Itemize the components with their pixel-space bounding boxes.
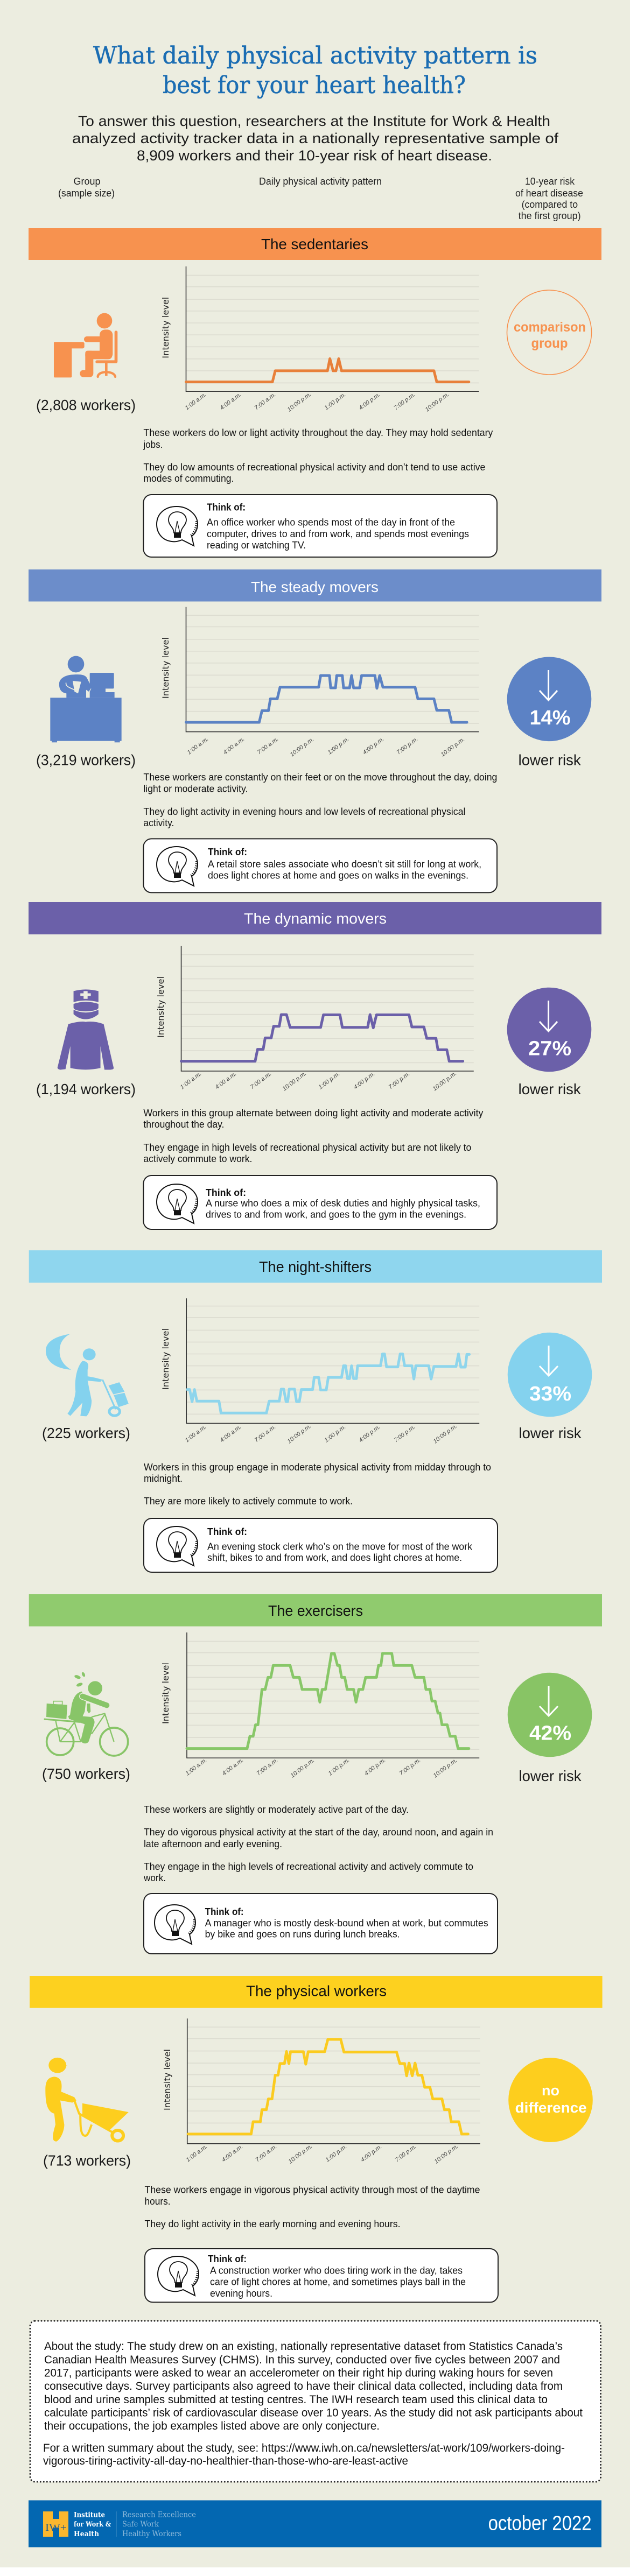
line chart: exercisers: 4:00 p.m. (363, 1757, 387, 1777)
description: They are more likely to actively commute to work. (144, 1496, 353, 1507)
callout: think of (144, 1894, 498, 1954)
icon: light bulb (157, 506, 198, 546)
line chart: dynamic movers: 7:00 a.m. (249, 1071, 273, 1090)
line chart: steady movers: 1:00 p.m. (327, 736, 351, 756)
callout: think of: A manager who is mostly desk-bound when at work, but commutes (205, 1918, 488, 1929)
line chart: sedentaries: 1:00 p.m. (324, 391, 347, 411)
callout: think of: Think of: (208, 2254, 247, 2264)
callout: think of: A nurse who does a mix of desk duties and highly physical tasks, (206, 1198, 480, 1208)
line chart: night-shifters: 4:00 p.m. (358, 1424, 382, 1444)
sample size: (3,219 workers) (36, 752, 136, 769)
column header: risk: 10-year risk (525, 176, 575, 187)
callout: think of: by bike and goes on runs during lunch breaks. (205, 1929, 400, 1940)
line chart: steady movers: 4:00 p.m. (362, 736, 386, 756)
description: They do low amounts of recreational physical activity and don’t tend to use active (143, 462, 485, 473)
line chart: physical workers: 4:00 p.m. (360, 2143, 383, 2163)
line chart: night-shifters: 7:00 p.m. (393, 1424, 417, 1444)
callout: think of: Think of: (208, 847, 247, 857)
intro text (72, 113, 559, 164)
line chart: night-shifters: 4:00 a.m. (219, 1424, 243, 1444)
callout: think of: A construction worker who does tiring work in the day, takes (210, 2265, 463, 2276)
icon: person sitting at desk (54, 313, 117, 377)
line chart: night-shifters: 10:00 p.m. (432, 1423, 458, 1445)
description: hours. (144, 2196, 170, 2207)
panel: about the study: vigorous-tiring-activity-all-day-no-healthier-than-those-who-are-least-active (43, 2455, 408, 2467)
line chart: sedentaries: 4:00 a.m. (219, 391, 243, 411)
description: These workers engage in vigorous physical activity through most of the daytime (144, 2185, 480, 2195)
footer (29, 2500, 601, 2547)
panel: the dynamic movers (29, 902, 601, 1229)
banner: the physical workers (30, 1976, 603, 2008)
panel: about the study: consecutive days. Survey participants also agreed to have their clinical data collected, including data from (44, 2380, 563, 2392)
badge: 42% lower risk: lower risk (519, 1768, 582, 1784)
sample size: (750 workers) (42, 1765, 130, 1782)
badge: no difference: difference (515, 2100, 587, 2116)
description: They engage in high levels of recreational physical activity but are not likely to (143, 1142, 471, 1153)
banner: the sedentaries: The sedentaries (261, 236, 368, 252)
panel: about the study: 2017, participants were asked to wear an accelerometer on their right hip during waking hours for seven (44, 2367, 553, 2380)
line chart: dynamic movers: Intensity level (156, 976, 166, 1038)
title (93, 42, 537, 99)
line chart: physical workers: 1:00 a.m. (185, 2143, 209, 2163)
callout: think of: does light chores at home and goes on walks in the evenings. (208, 870, 468, 881)
line chart: physical workers: 4:00 a.m. (221, 2143, 244, 2163)
institute name: for Work & (74, 2521, 111, 2529)
badge: 14% lower risk (507, 657, 591, 769)
column header: pattern: Daily physical activity pattern (259, 176, 382, 187)
badge: 14% lower risk: lower risk (519, 752, 582, 769)
callout: think of: computer, drives to and from work, and spends most evenings (207, 529, 469, 539)
panel: about the study: their occupations, the job examples listed above are only conjecture. (44, 2420, 380, 2432)
column header: group: Group (73, 176, 100, 187)
line chart: physical workers (162, 2018, 480, 2165)
description: These workers do low or light activity throughout the day. They may hold sedentary (143, 427, 493, 438)
line chart: night-shifters: 1:00 a.m. (184, 1424, 208, 1444)
line chart: sedentaries: Intensity level (160, 297, 171, 358)
description: Workers in this group engage in moderate physical activity from midday through to (144, 1462, 491, 1473)
line chart: sedentaries: 10:00 p.m. (286, 391, 312, 413)
panel: about the study: blood and urine samples submitted at testing centres. The IWH research team used this clinical data to (44, 2394, 548, 2406)
intro text: To answer this question, researchers at the Institute for Work & Health (78, 113, 550, 129)
line chart: exercisers: Intensity level (160, 1663, 171, 1724)
badge: 27% lower risk: 27% (528, 1038, 571, 1060)
description: These workers are constantly on their feet or on the move throughout the day, doing (143, 772, 497, 783)
line chart: night-shifters: Intensity level (160, 1328, 171, 1390)
description (144, 2185, 480, 2229)
line chart: sedentaries: 7:00 p.m. (393, 391, 417, 411)
line chart: dynamic movers: 1:00 p.m. (318, 1071, 341, 1090)
badge: 33% lower risk (508, 1333, 592, 1441)
column header: risk: of heart disease (515, 188, 583, 199)
badge: 42% lower risk: 42% (529, 1722, 571, 1745)
line chart: steady movers: 7:00 a.m. (256, 736, 280, 756)
intro text: 8,909 workers and their 10-year risk of heart disease. (137, 147, 492, 164)
description: late afternoon and early evening. (144, 1839, 282, 1849)
line chart: exercisers (160, 1632, 479, 1779)
banner: the dynamic movers: The dynamic movers (244, 910, 387, 927)
panel: about the study: For a written summary about the study, see: https://www.iwh.on.ca/newsletters/at-work/109/workers-doing- (43, 2442, 565, 2454)
line chart: exercisers: 1:00 a.m. (185, 1757, 208, 1777)
banner: the steady movers (29, 569, 601, 602)
title: best for your heart health? (163, 72, 466, 99)
column header: risk: (compared to (522, 199, 578, 210)
line chart: sedentaries: 7:00 a.m. (254, 391, 277, 411)
sample size: (2,808 workers) (36, 397, 136, 413)
line chart: dynamic movers (156, 946, 474, 1092)
callout: think of: A retail store sales associate who doesn’t sit still for long at work, (208, 858, 481, 869)
institute name (74, 2511, 111, 2538)
line chart: physical workers: 7:00 a.m. (255, 2143, 278, 2163)
icon: worker with wheelbarrow (45, 2058, 129, 2142)
description: throughout the day. (143, 1119, 224, 1130)
icon: moon and person with hand truck (46, 1334, 129, 1416)
callout: think of: care of light chores at home, and sometimes plays ball in the (210, 2277, 466, 2288)
badge: no difference (508, 2058, 593, 2142)
line chart: steady movers: 10:00 p.m. (289, 736, 315, 758)
description: Workers in this group alternate between doing light activity and moderate activity (143, 1108, 483, 1118)
description: light or moderate activity. (143, 783, 248, 794)
callout: think of: Think of: (206, 1187, 246, 1198)
description (144, 1462, 491, 1507)
description: These workers are slightly or moderately active part of the day. (144, 1804, 409, 1815)
badge: 33% lower risk: lower risk (519, 1425, 582, 1441)
sample size: (1,194 workers) (36, 1081, 136, 1097)
badge: 27% lower risk: lower risk (519, 1081, 582, 1097)
line chart: physical workers: 10:00 p.m. (288, 2143, 313, 2165)
callout: think of: Think of: (205, 1906, 244, 1917)
tagline: Research Excellence (122, 2510, 196, 2519)
description (143, 1804, 493, 1883)
column header: group (58, 176, 115, 199)
institute name: Institute (74, 2511, 105, 2519)
tagline: Healthy Workers (122, 2530, 181, 2538)
description: midnight. (144, 1473, 183, 1484)
icon: nurse (58, 989, 114, 1070)
date: october 2022 (488, 2512, 592, 2535)
line chart: steady movers: 4:00 a.m. (222, 736, 246, 756)
icon: cyclist with briefcase (44, 1672, 128, 1756)
panel: about the study: About the study: The study drew on an existing, nationally representative dataset from Statistics Canada’s (44, 2340, 563, 2353)
sample size: (713 workers) (43, 2152, 131, 2169)
line chart: exercisers: 7:00 a.m. (256, 1757, 279, 1777)
description: They engage in the high levels of recreational activity and actively commute to (144, 1861, 473, 1872)
line chart: exercisers: 10:00 p.m. (432, 1757, 458, 1779)
intro text: analyzed activity tracker data in a nationally representative sample of (72, 130, 559, 146)
panel: the steady movers (29, 569, 601, 892)
badge: 33% lower risk: 33% (529, 1383, 571, 1405)
banner: the night-shifters (29, 1250, 602, 1283)
description: modes of commuting. (143, 473, 234, 484)
column header: risk: the first group) (519, 210, 581, 221)
line chart: exercisers: 4:00 a.m. (221, 1757, 245, 1777)
line chart: sedentaries: 4:00 p.m. (358, 391, 382, 411)
column header: risk (515, 176, 583, 221)
line chart: steady movers: 7:00 p.m. (396, 736, 419, 756)
panel: the physical workers (30, 1976, 603, 2302)
title: What daily physical activity pattern is (93, 42, 537, 69)
icon: light bulb (158, 2256, 199, 2296)
description: They do light activity in the early morning and evening hours. (144, 2219, 401, 2229)
callout: think of: reading or watching TV. (207, 540, 306, 551)
badge: comparison group: comparison (514, 320, 586, 335)
line chart: night-shifters (160, 1298, 479, 1445)
description: activity. (143, 818, 174, 828)
icon: light bulb (157, 847, 198, 886)
line chart: dynamic movers: 7:00 p.m. (388, 1071, 411, 1090)
line chart: dynamic movers: 1:00 a.m. (179, 1071, 203, 1090)
line chart: night-shifters: 7:00 a.m. (254, 1424, 277, 1444)
line chart: steady movers: Intensity level (160, 637, 171, 699)
badge: 42% lower risk (508, 1673, 592, 1784)
callout: think of (143, 839, 497, 892)
icon: light bulb (157, 1184, 198, 1223)
badge: 27% lower risk (507, 988, 591, 1097)
tagline: Safe Work (122, 2520, 159, 2529)
line chart: night-shifters: 1:00 p.m. (324, 1424, 347, 1444)
logo: IWH: IW+ (45, 2522, 67, 2533)
callout: think of: An evening stock clerk who’s on the move for most of the work (207, 1542, 473, 1552)
description (143, 772, 497, 828)
description: actively commute to work. (143, 1153, 252, 1164)
banner: the sedentaries (29, 228, 601, 260)
banner: the physical workers: The physical workers (246, 1983, 387, 2000)
icon: light bulb (155, 1905, 195, 1944)
line chart: exercisers: 7:00 p.m. (398, 1757, 422, 1777)
callout: think of (143, 495, 497, 557)
panel: the night-shifters (29, 1250, 602, 1572)
description: work. (143, 1873, 166, 1883)
line chart: physical workers: 10:00 p.m. (433, 2143, 459, 2165)
callout: think of: evening hours. (210, 2288, 272, 2299)
line chart: sedentaries: 10:00 p.m. (424, 391, 450, 413)
banner: the steady movers: The steady movers (251, 579, 379, 595)
panel: the sedentaries (29, 228, 601, 557)
line chart: sedentaries: 1:00 a.m. (184, 391, 208, 411)
callout: think of: shift, bikes to and from work, and does light chores at home. (207, 1552, 462, 1563)
panel: about the study: calculate participants’ risk of cardiovascular disease over 10 years. As the study did not ask participants about (44, 2407, 583, 2419)
panel: about the study (30, 2321, 601, 2482)
callout: think of: drives to and from work, and goes to the gym in the evenings. (206, 1209, 466, 1220)
line chart: dynamic movers: 10:00 p.m. (282, 1071, 307, 1092)
line chart: dynamic movers: 4:00 a.m. (214, 1071, 238, 1090)
icon: person at computer desk (50, 656, 122, 742)
panel: the exercisers (29, 1594, 602, 1954)
line chart: physical workers: Intensity level (162, 2049, 172, 2110)
description: jobs. (143, 439, 163, 450)
line chart: exercisers: 1:00 p.m. (327, 1757, 351, 1777)
banner: the exercisers (29, 1594, 602, 1627)
line chart: steady movers: 10:00 p.m. (440, 736, 466, 758)
logo: IWH (43, 2511, 68, 2537)
line chart: exercisers: 10:00 p.m. (290, 1757, 316, 1779)
callout: think of (145, 2249, 498, 2302)
line chart: steady movers: 1:00 a.m. (186, 736, 210, 756)
badge: no difference: no (542, 2082, 559, 2099)
description: They do light activity in evening hours and low levels of recreational physical (143, 806, 465, 817)
callout: think of: Think of: (207, 502, 246, 513)
banner: the night-shifters: The night-shifters (259, 1258, 372, 1275)
badge: comparison group (507, 290, 591, 375)
sample size: (225 workers) (42, 1425, 130, 1441)
banner: the dynamic movers (29, 902, 601, 934)
line chart: dynamic movers: 4:00 p.m. (353, 1071, 376, 1090)
banner: the exercisers: The exercisers (268, 1602, 363, 1619)
column header: group: (sample size) (58, 188, 115, 199)
line chart: night-shifters: 10:00 p.m. (286, 1423, 312, 1445)
line chart: dynamic movers: 10:00 p.m. (432, 1071, 458, 1092)
description: They do vigorous physical activity at the start of the day, around noon, and again in (144, 1827, 493, 1838)
badge: 14% lower risk: 14% (530, 707, 571, 729)
callout: think of (144, 1518, 498, 1572)
callout: think of: An office worker who spends most of the day in front of the (207, 517, 455, 527)
institute name: Health (74, 2530, 100, 2538)
description (143, 1108, 483, 1164)
line chart: physical workers: 7:00 p.m. (394, 2143, 418, 2163)
line chart: sedentaries (160, 266, 479, 413)
callout: think of: Think of: (207, 1526, 247, 1537)
panel: about the study: Canadian Health Measures Survey (CHMS). In this survey, conducted over five cycles between 2007 and (44, 2354, 560, 2366)
tagline (122, 2510, 196, 2538)
line chart: physical workers: 1:00 p.m. (325, 2143, 348, 2163)
description (143, 427, 493, 484)
badge: comparison group: group (531, 336, 568, 351)
line chart: steady movers (160, 607, 479, 758)
callout: think of (143, 1176, 497, 1229)
icon: light bulb (157, 1526, 198, 1566)
